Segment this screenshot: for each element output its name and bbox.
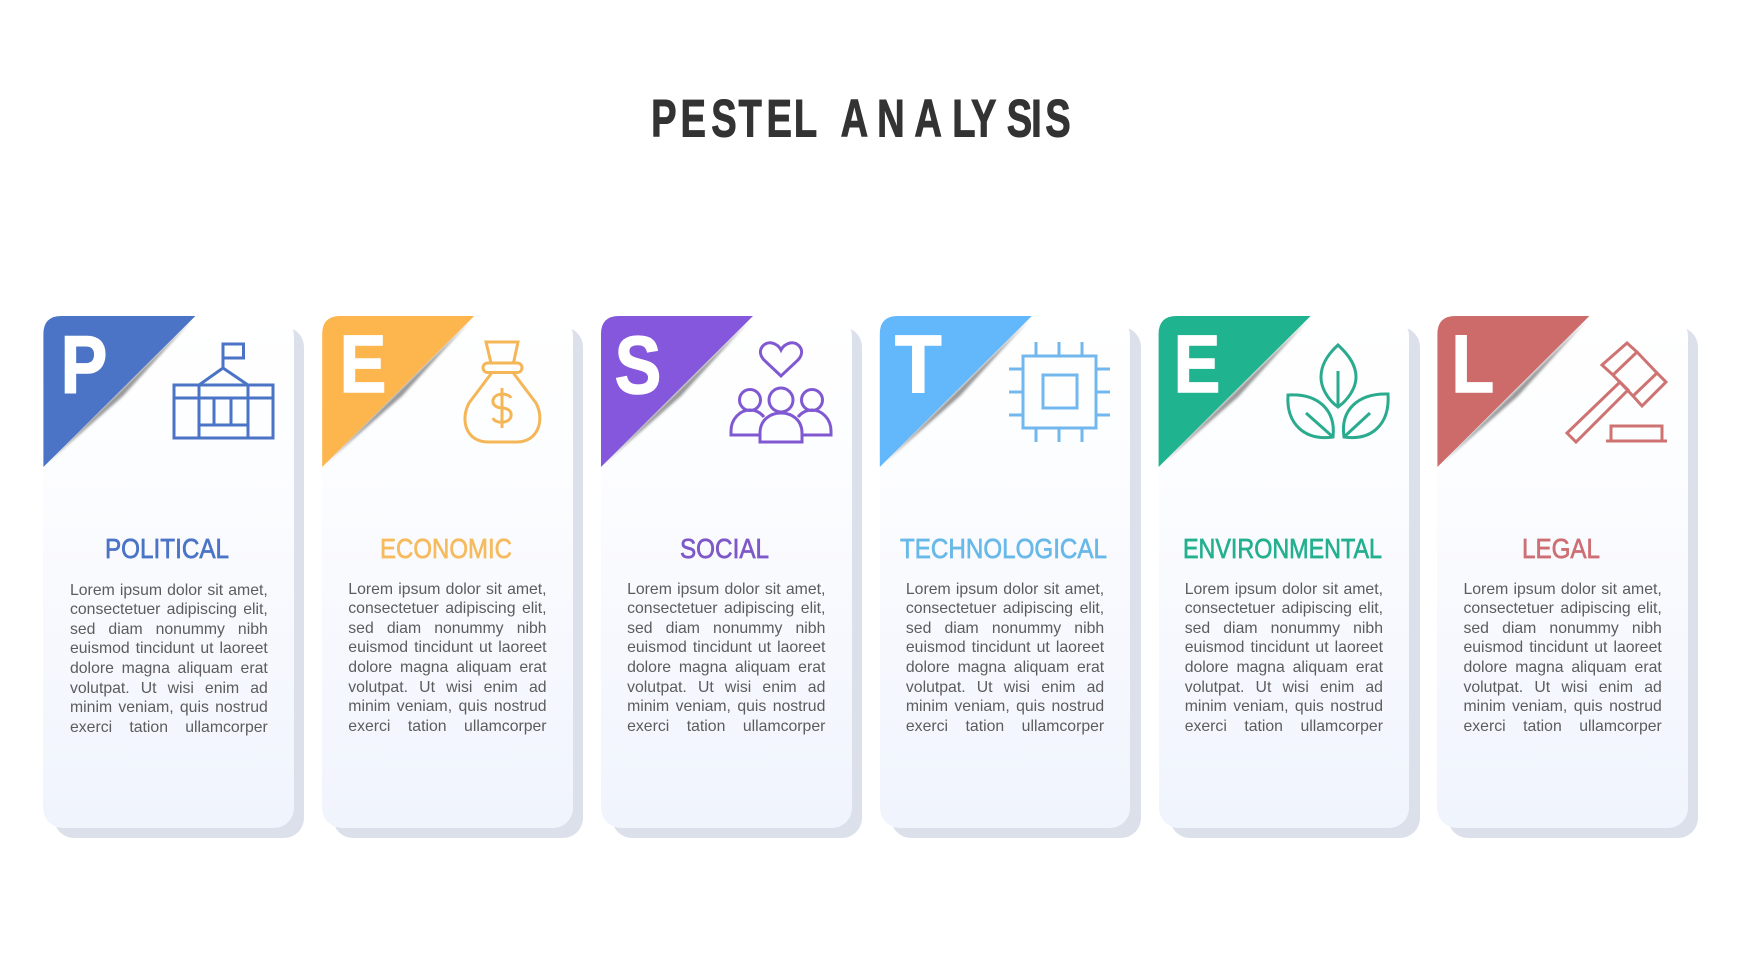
text block: legal: minim veniam, quis nostrud <box>1463 698 1662 715</box>
text block: political <box>70 582 268 736</box>
text block: environmental: consectetuer adipiscing elit, <box>1185 600 1383 617</box>
panel: environmental <box>1158 316 1420 838</box>
letter banner: P <box>43 316 195 467</box>
text block: social: volutpat. Ut wisi enim ad <box>627 679 825 696</box>
icon: leaves <box>1288 345 1388 438</box>
text block: political: consectetuer adipiscing elit, <box>70 601 268 618</box>
text block: legal: volutpat. Ut wisi enim ad <box>1463 679 1662 696</box>
text block: technological: Lorem ipsum dolor sit amet, <box>906 581 1104 598</box>
text block: economic: sed diam nonummy nibh <box>348 620 547 637</box>
panel: political <box>43 316 304 838</box>
text block: economic <box>348 581 547 735</box>
text block: technological <box>906 581 1104 735</box>
panel: economic <box>322 316 583 838</box>
text block: political: exerci tation ullamcorper <box>70 719 268 736</box>
text block: legal: sed diam nonummy nibh <box>1463 620 1662 637</box>
text block: environmental <box>1184 581 1383 735</box>
icon: government building <box>174 344 273 438</box>
text block: political: euismod tincidunt ut laoreet <box>70 640 268 657</box>
text block: environmental: Lorem ipsum dolor sit amet, <box>1185 581 1383 598</box>
text block: environmental: exerci tation ullamcorper <box>1185 718 1383 735</box>
text block: economic: euismod tincidunt ut laoreet <box>348 639 547 656</box>
text block: economic: exerci tation ullamcorper <box>348 718 547 735</box>
text block: technological: consectetuer adipiscing elit, <box>906 600 1104 617</box>
icon: microchip <box>1009 342 1110 442</box>
icon: people and heart <box>731 343 831 442</box>
title: PESTEL ANALYSIS <box>651 88 1071 148</box>
text block: political: sed diam nonummy nibh <box>70 621 268 638</box>
text block: social <box>627 581 826 735</box>
letter banner: E <box>322 316 474 467</box>
heading: economic: ECONOMIC <box>380 533 512 564</box>
icon: money bag <box>465 342 540 442</box>
panel: technological <box>880 316 1141 838</box>
letter banner: E <box>1159 316 1311 467</box>
text block: technological: volutpat. Ut wisi enim ad <box>906 679 1104 696</box>
text block: legal: euismod tincidunt ut laoreet <box>1463 639 1662 656</box>
text block: legal: Lorem ipsum dolor sit amet, <box>1463 581 1662 598</box>
text block: social: dolore magna aliquam erat <box>627 659 825 676</box>
letter banner: T <box>880 316 1032 467</box>
heading: political: POLITICAL <box>105 533 229 564</box>
panel: legal <box>1437 316 1698 838</box>
text block: social: euismod tincidunt ut laoreet <box>627 639 825 656</box>
text block: political: Lorem ipsum dolor sit amet, <box>70 582 268 599</box>
letter banner: L <box>1437 316 1589 467</box>
text block: economic: consectetuer adipiscing elit, <box>348 600 547 617</box>
letter banner: L: L <box>1452 319 1494 410</box>
heading: technological: TECHNOLOGICAL <box>900 533 1107 564</box>
text block: technological: minim veniam, quis nostrud <box>906 698 1104 715</box>
text block: environmental: minim veniam, quis nostrud <box>1185 698 1383 715</box>
letter banner: T: T <box>895 317 942 410</box>
text block: economic: Lorem ipsum dolor sit amet, <box>348 581 547 598</box>
text block: technological: dolore magna aliquam erat <box>906 659 1104 676</box>
text block: legal <box>1463 581 1662 735</box>
text block: legal: consectetuer adipiscing elit, <box>1463 600 1662 617</box>
text block: technological: euismod tincidunt ut laoreet <box>906 639 1104 656</box>
text block: environmental: sed diam nonummy nibh <box>1185 620 1383 637</box>
text block: political: volutpat. Ut wisi enim ad <box>70 680 268 697</box>
text block: economic: dolore magna aliquam erat <box>348 659 547 676</box>
text block: technological: exerci tation ullamcorper <box>906 718 1104 735</box>
text block: technological: sed diam nonummy nibh <box>906 620 1104 637</box>
letter banner: S: S <box>615 320 661 411</box>
text block: legal: exerci tation ullamcorper <box>1463 718 1662 735</box>
letter banner: E: E <box>340 319 386 410</box>
panel: social <box>601 316 862 838</box>
icon: gavel <box>1567 343 1667 442</box>
text block: legal: dolore magna aliquam erat <box>1463 659 1662 676</box>
text block: economic: minim veniam, quis nostrud <box>348 698 547 715</box>
text block: environmental: dolore magna aliquam erat <box>1185 659 1383 676</box>
text block: political: minim veniam, quis nostrud <box>70 699 268 716</box>
text block: economic: volutpat. Ut wisi enim ad <box>348 679 547 696</box>
text block: social: sed diam nonummy nibh <box>627 620 825 637</box>
text block: environmental: volutpat. Ut wisi enim ad <box>1185 679 1383 696</box>
text block: social: Lorem ipsum dolor sit amet, <box>627 581 825 598</box>
letter banner: E: E <box>1174 319 1220 410</box>
heading: legal: LEGAL <box>1522 533 1600 564</box>
text block: political: dolore magna aliquam erat <box>70 660 268 677</box>
text block: social: minim veniam, quis nostrud <box>627 698 825 715</box>
letter banner: S <box>601 316 753 467</box>
text block: social: consectetuer adipiscing elit, <box>627 600 825 617</box>
letter banner: P: P <box>61 320 107 411</box>
text block: environmental: euismod tincidunt ut laoreet <box>1185 639 1383 656</box>
heading: social: SOCIAL <box>680 533 769 564</box>
heading: environmental: ENVIRONMENTAL <box>1183 533 1382 564</box>
text block: social: exerci tation ullamcorper <box>627 718 825 735</box>
